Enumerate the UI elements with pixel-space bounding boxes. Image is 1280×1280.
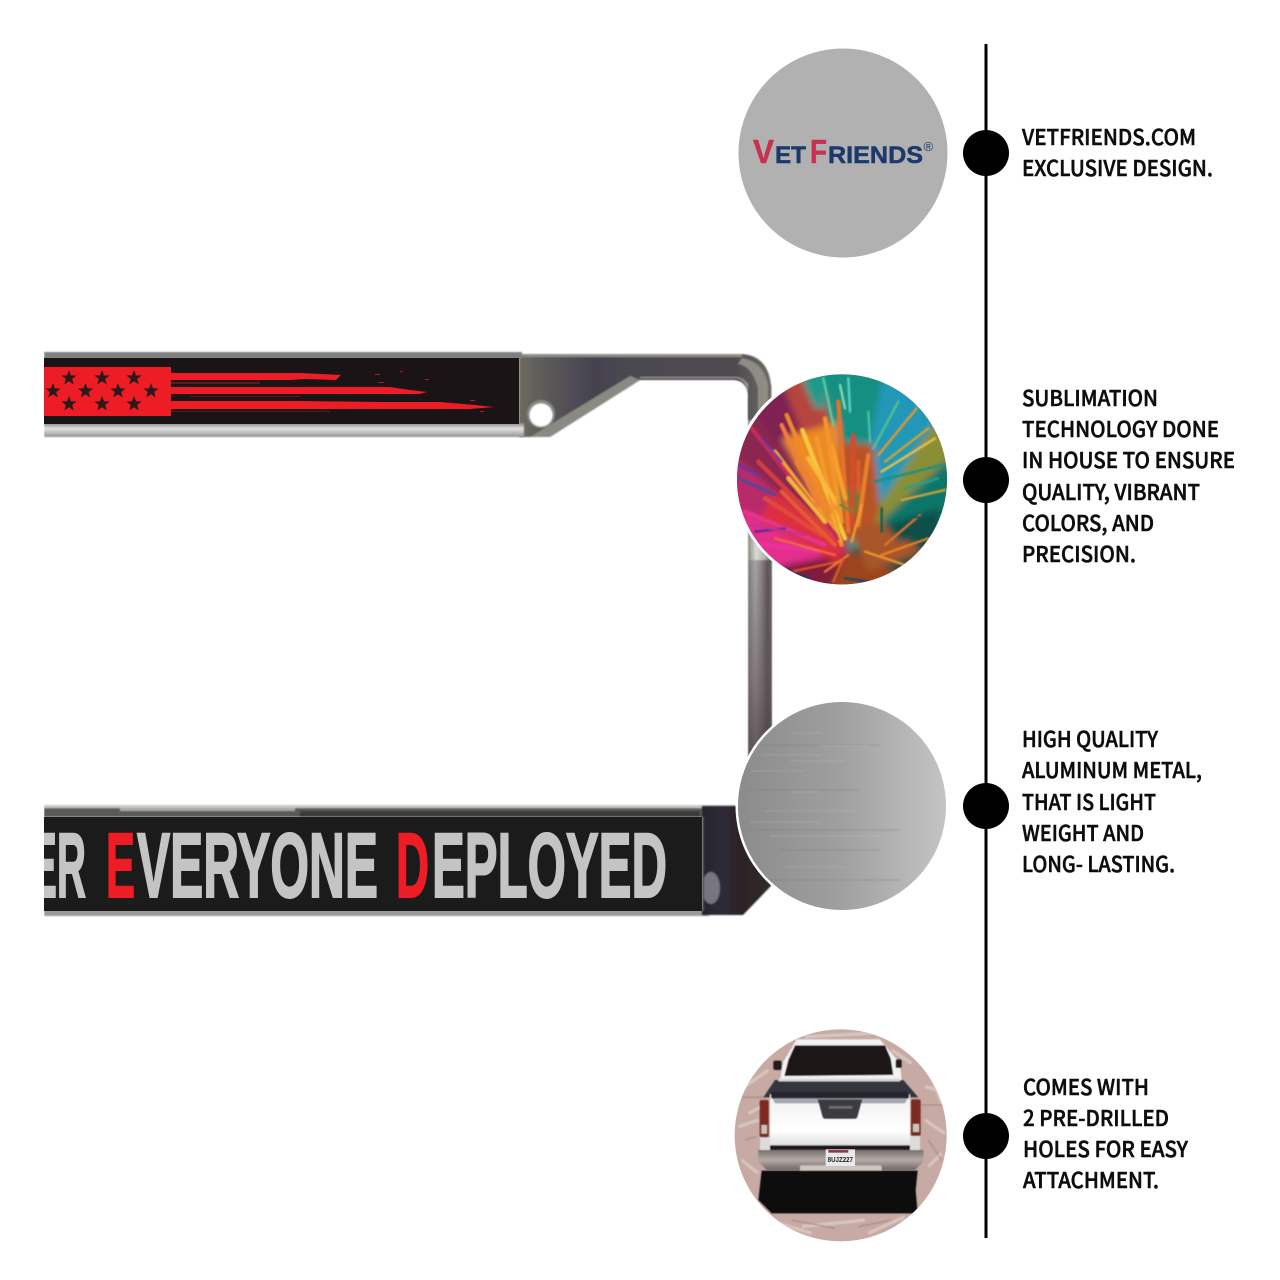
feature text 1 bbox=[1021, 120, 1213, 183]
feature text 2: PRECISION. bbox=[1022, 537, 1136, 569]
tailgate handle bbox=[818, 1099, 862, 1119]
bottom panel: slogan strip bbox=[30, 815, 702, 917]
truck bed bbox=[763, 1080, 918, 1097]
timeline dot 1 bbox=[963, 130, 1009, 176]
tailgate bbox=[770, 1094, 910, 1147]
badge: brushed aluminum circle bbox=[736, 700, 948, 912]
feature 1: VetFriends design bbox=[738, 48, 1213, 258]
logo wordmark bbox=[753, 133, 934, 170]
feature text 4: ATTACHMENT. bbox=[1023, 1163, 1159, 1195]
flag stripes bbox=[171, 371, 494, 412]
feature text 1: VETFRIENDS.COM bbox=[1021, 120, 1196, 152]
flag canton with stars bbox=[44, 367, 171, 416]
slogan text: D bbox=[396, 815, 429, 917]
licence plate: 8UJZ227 bbox=[828, 1155, 853, 1164]
frame: top right chrome corner with mounting hole bbox=[519, 354, 771, 437]
feature 3: aluminum metal bbox=[736, 700, 1202, 912]
frame: bottom right corner bbox=[702, 806, 771, 915]
frame: bottom chrome bar bbox=[44, 805, 749, 916]
feature text 2: IN HOUSE TO ENSURE bbox=[1022, 443, 1235, 475]
tail lights bbox=[760, 1099, 921, 1137]
badge: colourful paint burst bbox=[737, 374, 947, 584]
license plate frame bbox=[0, 340, 772, 930]
logo wordmark: ET bbox=[775, 142, 806, 169]
truck cab bbox=[780, 1039, 902, 1080]
timeline dot 2 bbox=[963, 457, 1009, 503]
feature text 2: COLORS, AND bbox=[1022, 506, 1154, 538]
feature 2: sublimation technology bbox=[737, 374, 1234, 584]
slogan text: VERYONE bbox=[137, 815, 378, 917]
shadow under truck bbox=[758, 1171, 918, 1213]
feature text 2 bbox=[1022, 381, 1235, 569]
rear bumper bbox=[758, 1150, 923, 1170]
feature text 4: HOLES FOR EASY bbox=[1023, 1132, 1189, 1164]
licence plate bbox=[826, 1149, 855, 1166]
feature text 3: THAT IS LIGHT bbox=[1022, 785, 1156, 817]
badge: VetFriends logo circle bbox=[738, 48, 948, 258]
left edge mask bbox=[0, 340, 44, 930]
badge: pickup truck rear view bbox=[734, 1029, 947, 1242]
feature 4: pre-drilled holes bbox=[734, 1029, 1188, 1242]
feature text 3: ALUMINUM METAL, bbox=[1022, 753, 1202, 785]
feature text 4: COMES WITH bbox=[1023, 1070, 1149, 1102]
timeline line bbox=[984, 44, 988, 1238]
slogan text: E bbox=[106, 815, 135, 917]
feature text 3: HIGH QUALITY bbox=[1022, 722, 1159, 754]
timeline dot 4 bbox=[963, 1113, 1009, 1159]
frame: top chrome bar bbox=[44, 352, 524, 437]
slogan text bbox=[30, 815, 667, 917]
feature text 3: LONG- LASTING. bbox=[1022, 847, 1175, 879]
feature text 4 bbox=[1023, 1070, 1189, 1195]
slogan text: ER bbox=[30, 815, 86, 917]
logo wordmark: RIENDS bbox=[828, 142, 923, 169]
top panel: black strip with distressed red flag bbox=[44, 358, 519, 424]
frame: right side rail bbox=[748, 385, 772, 760]
feature text 3 bbox=[1022, 722, 1202, 879]
icon: mounting hole bbox=[527, 400, 555, 428]
logo wordmark: ® bbox=[924, 139, 934, 154]
slogan text: EPLOYED bbox=[432, 815, 667, 917]
logo wordmark: F bbox=[810, 133, 827, 170]
feature text 2: QUALITY, VIBRANT bbox=[1022, 475, 1200, 507]
feature text 4: 2 PRE-DRILLED bbox=[1023, 1101, 1169, 1133]
timeline dot 3 bbox=[963, 783, 1009, 829]
feature text 3: WEIGHT AND bbox=[1022, 816, 1144, 848]
burst streaks bbox=[742, 402, 868, 552]
feature text 1: EXCLUSIVE DESIGN. bbox=[1022, 151, 1213, 183]
feature text 2: TECHNOLOGY DONE bbox=[1022, 412, 1219, 444]
feature text 2: SUBLIMATION bbox=[1022, 381, 1158, 413]
logo wordmark: V bbox=[753, 133, 774, 170]
